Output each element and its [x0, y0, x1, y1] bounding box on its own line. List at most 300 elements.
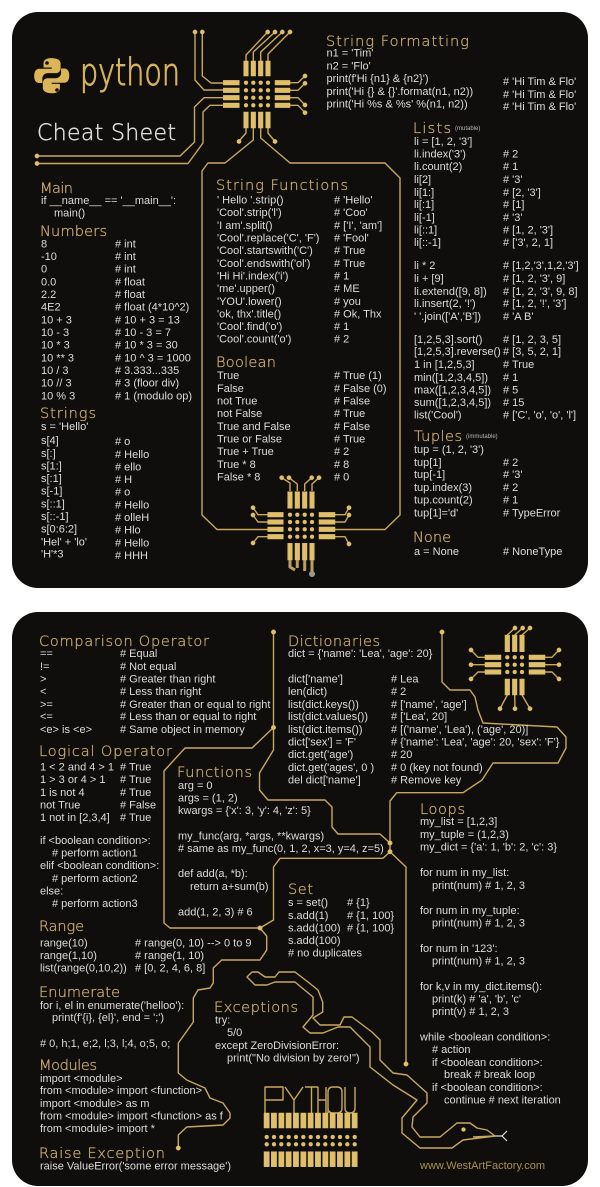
section: Lists: li + [9]	[414, 273, 444, 285]
section: Range: # range(0, 10) --> 0 to 9	[135, 938, 251, 950]
note: immutable: (immutable)	[466, 434, 498, 440]
section: String Functions: 'ok, thx'.title()	[217, 308, 281, 320]
circuit: lower chip	[251, 476, 351, 577]
section: Lists: li[-1]	[414, 212, 435, 224]
section: Logical Operator: # True	[120, 774, 151, 786]
section: Comparison Operator: !=	[40, 661, 49, 673]
section: String Formatting: print('Hi %s & %s' %(n1, n2))	[326, 98, 468, 110]
heading: Raise Exception: Raise Exception	[39, 1146, 165, 1162]
section: Logical Operator: # True	[120, 787, 151, 799]
section: Logical Operator: else:	[40, 886, 63, 898]
section: Lists: # '3'	[503, 212, 522, 224]
section: Dictionaries: dict['sex'] = 'F'	[288, 736, 356, 748]
section: Numbers: 10 - 3	[41, 327, 69, 339]
section: Lists: [1,2,5,3].reverse()	[414, 346, 501, 358]
section: Strings: # olleH	[115, 512, 149, 524]
section: Lists: # 1	[503, 161, 518, 173]
section: Strings: 'H'*3	[41, 548, 64, 560]
section: Main: if __name__ == '__main__':	[41, 195, 176, 207]
section: Range: range(10)	[40, 938, 88, 950]
heading: Lists: Lists	[413, 121, 451, 137]
section: Lists: # ['C', 'o', 'o', 'l']	[503, 410, 576, 422]
section: String Functions: # True	[334, 258, 365, 270]
section: Loops: for num in my_tuple:	[420, 905, 520, 917]
section: Dictionaries: dict.get('ages', 0 )	[288, 762, 374, 774]
section: Loops: print(num) # 1, 2, 3	[432, 880, 525, 892]
section: Modules: import <module>	[40, 1073, 123, 1085]
section: String Functions: # 'Coo'	[334, 207, 368, 219]
section: Comparison Operator: <e> is <e>	[40, 724, 92, 736]
section: Strings: # ello	[115, 462, 141, 474]
section: Dictionaries: del dict['name']	[288, 774, 361, 786]
heading: String Formatting: String Formatting	[326, 34, 469, 50]
section: String Functions: 'Cool'.startswith('C')	[217, 245, 313, 257]
section: Tuples: # 1	[503, 494, 518, 506]
section: Set: s = set()	[288, 897, 328, 909]
section: Lists: # [1, 2, '3', 9]	[503, 273, 565, 285]
section: String Formatting: # 'Hi Tim & Flo'	[503, 89, 576, 101]
section: Loops: for num in '123':	[420, 943, 498, 955]
heading: Dictionaries: Dictionaries	[288, 634, 380, 650]
section: Logical Operator: # True	[120, 762, 151, 774]
section: String Functions: # ['I', 'am']	[334, 220, 382, 232]
panel: top card	[12, 12, 588, 588]
section: None: a = None	[414, 546, 459, 558]
section: Exceptions: 5/0	[227, 1027, 242, 1039]
section: Lists: # [1]	[503, 199, 524, 211]
section: Dictionaries: list(dict.keys())	[288, 699, 359, 711]
section: Boolean: # False	[334, 396, 370, 408]
section: Numbers: # float	[115, 276, 145, 288]
section: Logical Operator: elif <boolean condition>:	[40, 860, 159, 872]
section: Modules: import <module> as m	[40, 1098, 149, 1110]
section: Loops: my_dict = {'a': 1, 'b': 2, 'c': 3}	[420, 842, 557, 854]
section: Boolean: False * 8	[217, 472, 260, 484]
circuit: top chip	[35, 30, 400, 530]
icon: PYTHON chip lettering	[264, 1087, 357, 1167]
section: String Functions: 'Cool'.replace('C', 'F')	[217, 232, 319, 244]
section: Loops: if <boolean condition>:	[432, 1057, 543, 1069]
section: Lists: li.count(2)	[414, 161, 462, 173]
section: Numbers: 10 % 3	[41, 390, 75, 402]
section: Range: # [0, 2, 4, 6, 8]	[135, 962, 205, 974]
section: Strings: s[0:6:2]	[41, 524, 77, 536]
section: Loops: for num in my_list:	[420, 867, 509, 879]
section: Lists: li[::1]	[414, 224, 437, 236]
section: Lists: li = [1, 2, '3']	[414, 136, 472, 148]
section: Dictionaries: # 0 (key not found)	[391, 762, 483, 774]
section: Dictionaries	[288, 634, 560, 786]
heading: None: None	[413, 530, 451, 546]
note: mutable: (mutable)	[455, 126, 480, 132]
section: Logical Operator: # perform action3	[52, 898, 138, 910]
section: Tuples: tup[-1]	[414, 469, 445, 481]
section: Dictionaries: # ['name', 'age']	[391, 699, 467, 711]
section: String Formatting: n1 = 'Tim'	[326, 48, 373, 60]
section: Numbers: 0.0	[41, 276, 56, 288]
section: Lists: # [1, 2, 3, 5]	[503, 334, 561, 346]
section: Strings: # Hlo	[115, 525, 141, 537]
heading: Main: Main	[40, 181, 73, 197]
section: String Functions: 'Cool'.strip('l')	[217, 207, 282, 219]
section: Numbers: 0	[41, 264, 47, 276]
section: Comparison Operator: # Equal	[120, 648, 157, 660]
section: Boolean: # 2	[334, 446, 349, 458]
section: Tuples: # TypeError	[503, 508, 561, 520]
section: Logical Operator: 1 < 2 and 4 > 1	[40, 762, 114, 774]
python logo	[34, 58, 69, 93]
title: Cheat Sheet: Cheat Sheet	[37, 121, 176, 146]
section: Functions: my_func(arg, *args, **kwargs)	[178, 830, 324, 842]
section: Logical Operator: 1 > 3 or 4 > 1	[40, 774, 105, 786]
section: Comparison Operator: # Greater than or equal to right	[120, 699, 270, 711]
section: Dictionaries: dict.get('age')	[288, 749, 353, 761]
heading: Loops: Loops	[420, 802, 465, 818]
section: Numbers: # 3.333...335	[115, 365, 179, 377]
section: Boolean: # 8	[334, 459, 349, 471]
section: Enumerate: print(f'{i}, {el}', end = ';')	[52, 1012, 164, 1024]
section: String Functions: # True	[334, 245, 365, 257]
section: Exceptions: print("No division by zero!")	[227, 1052, 360, 1064]
section: String Functions: # Ok, Thx	[334, 308, 382, 320]
section: Lists: max([1,2,3,4,5])	[414, 384, 491, 396]
heading: Strings: Strings	[40, 406, 96, 422]
section: Logical Operator: # True	[120, 812, 151, 824]
section: Exceptions: except ZeroDivisionError:	[215, 1040, 339, 1052]
section: Lists: li[1:]	[414, 187, 434, 199]
section: Numbers: 10 // 3	[41, 378, 72, 390]
section: Comparison Operator: # Less than or equal to right	[120, 711, 256, 723]
section: Dictionaries: dict['name']	[288, 674, 343, 686]
section: Strings: # Hello	[115, 499, 149, 511]
section: Dictionaries: len(dict)	[288, 686, 327, 698]
section: Comparison Operator: ==	[40, 648, 53, 660]
section: Lists: # ['3', 2, 1]	[503, 237, 553, 249]
section: Logical Operator: 1 not in [2,3,4]	[40, 812, 110, 824]
section: Strings: s[:]	[41, 448, 56, 460]
section: Tuples	[414, 429, 561, 520]
section: String Functions: 'Cool'.count('o')	[217, 334, 291, 346]
heading: Range: Range	[39, 919, 84, 935]
section: Lists: # 'A B'	[503, 311, 534, 323]
section: Functions: return a+sum(b)	[190, 881, 269, 893]
section: Enumerate: for i, el in enumerate('helloo'):	[40, 1000, 184, 1012]
section: Loops: print(num) # 1, 2, 3	[432, 956, 525, 968]
section: Lists: li[:1]	[414, 199, 434, 211]
heading: Exceptions: Exceptions	[214, 1000, 298, 1016]
section: Set: s.add(100)	[288, 935, 341, 947]
section: Lists: # [1,2,'3',1,2,'3']	[503, 260, 579, 272]
section: Lists: # 15	[503, 397, 524, 409]
section: Enumerate	[39, 985, 184, 1050]
section: String Functions: # 1	[334, 321, 349, 333]
section: Set: # {1, 100}	[347, 910, 394, 922]
section: Loops: # action	[432, 1044, 471, 1056]
section: Strings: # o	[115, 436, 130, 448]
section: String Formatting: # 'Hi Tim & Flo'	[503, 76, 576, 88]
heading: Set: Set	[288, 882, 313, 898]
section: Boolean: True	[217, 370, 239, 382]
section: Boolean: True and False	[217, 421, 291, 433]
section: Numbers: # 3 (floor div)	[115, 378, 179, 390]
section: Modules	[39, 1058, 224, 1135]
section: Range: range(1,10)	[40, 950, 97, 962]
section: Loops	[419, 802, 561, 1106]
section: Set: # no duplicates	[288, 948, 362, 960]
section: Tuples: tup = (1, 2, '3')	[414, 444, 484, 456]
section: Boolean: # False (0)	[334, 383, 387, 395]
section: Loops: my_tuple = (1,2,3)	[420, 829, 509, 841]
icon: circuit snake	[247, 972, 507, 1148]
icon: snake eye	[462, 1128, 466, 1132]
section: String Formatting: # 'Hi Tim & Flo'	[503, 101, 576, 113]
section: None	[413, 530, 562, 558]
section: Strings: # o	[115, 487, 130, 499]
section: Strings: s[1:]	[41, 460, 62, 472]
section: Lists	[413, 121, 579, 422]
section: Lists: # [1, 2, '3', 9, 8]	[503, 286, 578, 298]
circuit: board traces	[164, 630, 566, 1150]
section: Dictionaries: dict = {'name': 'Lea', 'age': 20}	[288, 648, 433, 660]
section: Numbers: # int	[115, 238, 136, 250]
section: Tuples: tup.count(2)	[414, 494, 473, 506]
section: Raise Exception: raise ValueError('some error message')	[40, 1160, 231, 1172]
footer: website: www.WestArtFactory.com	[419, 1160, 545, 1172]
section: Strings: 'Hel' + 'lo'	[41, 536, 87, 548]
section: None: # NoneType	[503, 546, 562, 558]
heading: Tuples: Tuples	[414, 429, 462, 445]
section: String Functions: ' Hello '.strip()	[217, 194, 284, 206]
section: Numbers: # 10 ^ 3 = 1000	[115, 352, 191, 364]
section: Logical Operator	[39, 744, 172, 910]
section: Comparison Operator: >=	[40, 699, 53, 711]
section: Logical Operator: if <boolean condition>:	[40, 835, 151, 847]
section: String Functions: 'me'.upper()	[217, 283, 275, 295]
section: Dictionaries: # 2	[391, 686, 406, 698]
section: Lists: li.insert(2, '!')	[414, 298, 476, 310]
section: Dictionaries: list(dict.values())	[288, 711, 368, 723]
section: Lists: li.extend([9, 8])	[414, 286, 487, 298]
section: Strings: # Hello	[115, 537, 149, 549]
section: String Functions: 'Hi Hi'.index('i')	[217, 270, 288, 282]
section: String Formatting: print('Hi {} & {}'.format(n1, n2))	[326, 86, 473, 98]
section: String Functions: # ME	[334, 283, 360, 295]
section: Lists: # 5	[503, 384, 518, 396]
section: Loops: break # break loop	[444, 1069, 535, 1081]
section: Logical Operator: not True	[40, 800, 80, 812]
section: Boolean	[216, 355, 387, 484]
section: Comparison Operator: # Greater than right	[120, 674, 215, 686]
section: Tuples: # 2	[503, 457, 518, 469]
section: Tuples: tup[1]='d'	[414, 508, 458, 520]
section: Modules: from <module> import <function>	[40, 1085, 202, 1097]
heading: Comparison Operator: Comparison Operator	[39, 634, 209, 650]
section: Boolean: # True (1)	[334, 370, 382, 382]
section: Dictionaries: # Lea	[391, 674, 419, 686]
section: Lists: min([1,2,3,4,5])	[414, 372, 488, 384]
section: Loops: print(k) # 'a', 'b', 'c'	[432, 994, 521, 1006]
section: Exceptions: try:	[215, 1014, 230, 1026]
section: Modules: from <module> import <function> as f	[40, 1110, 224, 1122]
section: Lists: # [3, 5, 2, 1]	[503, 346, 561, 358]
section: Lists: li[2]	[414, 174, 431, 186]
section: Comparison Operator: >	[40, 674, 46, 686]
section: String Functions: 'YOU'.lower()	[217, 296, 282, 308]
section: Comparison Operator: # Not equal	[120, 661, 176, 673]
section: Range: list(range(0,10,2))	[40, 962, 127, 974]
heading: Functions: Functions	[177, 765, 252, 781]
section: Numbers: -10	[41, 251, 57, 263]
section: Comparison Operator: <	[40, 686, 46, 698]
section: Numbers: 10 * 3	[41, 340, 70, 352]
section: Numbers: # 10 - 3 = 7	[115, 327, 171, 339]
section: Numbers: # int	[115, 251, 136, 263]
section: Lists: # [2, '3']	[503, 187, 541, 199]
section: Strings: s[::-1]	[41, 511, 69, 523]
section: Numbers: 10 / 3	[41, 365, 69, 377]
section: Dictionaries: # ['Lea', 20]	[391, 711, 447, 723]
heading: String Functions: String Functions	[216, 178, 348, 194]
section: Lists: li.index('3')	[414, 149, 466, 161]
section: Numbers: # 10 * 3 = 30	[115, 340, 178, 352]
section: Dictionaries: # {'name': 'Lea', 'age': 20, 'sex': 'F'}	[391, 736, 560, 748]
section: Raise Exception	[39, 1146, 231, 1172]
section: Boolean: # 0	[334, 472, 349, 484]
section: Boolean: not False	[217, 408, 262, 420]
section: Numbers: 4E2	[41, 302, 61, 314]
section: Functions: add(1, 2, 3) # 6	[178, 906, 253, 918]
section: Strings: s[::1]	[41, 498, 65, 510]
section: Lists: # 2	[503, 149, 518, 161]
section: Main: main()	[54, 208, 85, 220]
section: Tuples: # '3'	[503, 469, 522, 481]
section: Tuples: tup[1]	[414, 457, 442, 469]
section: Lists: list('Cool')	[414, 410, 462, 422]
panel: bottom card	[12, 612, 588, 1186]
section: Lists: # [1, 2, '!', '3']	[503, 298, 566, 310]
section: String Formatting: print(f'Hi {n1} & {n2}')	[326, 73, 429, 85]
section: Tuples: # 2	[503, 482, 518, 494]
heading: Modules: Modules	[39, 1058, 97, 1074]
section: Dictionaries: list(dict.items())	[288, 724, 363, 736]
section: Logical Operator: 1 is not 4	[40, 787, 85, 799]
section: Modules: from <module> import *	[40, 1123, 156, 1135]
section: String Functions: 'I am'.split()	[217, 220, 273, 232]
section: Loops: print(v) # 1, 2, 3	[432, 1006, 509, 1018]
section: Functions: arg = 0	[178, 780, 213, 792]
section: Dictionaries: # Remove key	[391, 774, 462, 786]
section: String Functions: # 2	[334, 334, 349, 346]
section: String Functions: 'Cool'.endswith('ol')	[217, 258, 310, 270]
section: Set	[288, 882, 394, 960]
section: String Formatting	[326, 34, 576, 113]
icon: corner chip	[469, 626, 561, 711]
section: Numbers: 10 ** 3	[41, 352, 74, 364]
section: Strings: # HHH	[115, 550, 148, 562]
section: Numbers: # 10 + 3 = 13	[115, 314, 180, 326]
section: Loops: for k,v in my_dict.items():	[420, 981, 542, 993]
section: Numbers: # float (4*10^2)	[115, 302, 189, 314]
section: String Functions: # you	[334, 296, 361, 308]
section: Exceptions	[214, 1000, 360, 1064]
section: String Functions: # 1	[334, 270, 349, 282]
section: Functions: kwargs = {'x': 3, 'y': 4, 'z': 5}	[178, 805, 311, 817]
section: Loops: print(num) # 1, 2, 3	[432, 918, 525, 930]
section: Loops: continue # next iteration	[444, 1094, 561, 1106]
section: Strings: s[:1]	[41, 473, 62, 485]
section: Comparison Operator: # Less than right	[120, 686, 201, 698]
section: Lists: ' '.join(['A','B'])	[414, 311, 481, 323]
section: Strings: s = 'Hello'	[41, 421, 88, 433]
section: Lists: # 1	[503, 372, 518, 384]
section: Set: s.add(1)	[288, 910, 328, 922]
section: Strings: # Hello	[115, 449, 149, 461]
section: Set: # {1, 100}	[347, 922, 394, 934]
section: Boolean: True or False	[217, 434, 282, 446]
heading: Enumerate: Enumerate	[39, 985, 120, 1001]
section: Dictionaries: # [('name', 'Lea'), ('age', 20)]	[391, 724, 528, 736]
section: String Formatting: n2 = 'Flo'	[326, 60, 371, 72]
section: Numbers: # float	[115, 289, 145, 301]
section: Enumerate: # 0, h;1, e;2, l;3, l;4, o;5, o;	[40, 1038, 170, 1050]
section: Numbers	[40, 224, 192, 402]
section: String Functions: # 'Hello'	[334, 194, 372, 206]
section: Comparison Operator: <=	[40, 711, 53, 723]
section: Lists: # True	[503, 359, 534, 371]
section: Set: # {1}	[347, 897, 370, 909]
section: Comparison Operator: # Same object in memory	[120, 724, 245, 736]
section: Numbers: 10 + 3	[41, 314, 72, 326]
section: Boolean: not True	[217, 396, 257, 408]
section: Loops: my_list = [1,2,3]	[420, 816, 497, 828]
heading: Logical Operator: Logical Operator	[39, 744, 172, 760]
section: Lists: # [1, 2, '3']	[503, 224, 553, 236]
section: Loops: if <boolean condition>:	[432, 1082, 543, 1094]
section: Main	[40, 181, 176, 220]
section: Functions: # same as my_func(0, 1, 2, x=3, y=4, z=5)	[178, 843, 384, 855]
section: Loops: while <boolean condition>:	[419, 1032, 550, 1044]
section: Range	[39, 919, 251, 974]
section: Boolean: False	[217, 383, 244, 395]
section: Dictionaries: # 20	[391, 749, 412, 761]
section: Boolean: # False	[334, 421, 370, 433]
section: Lists: li[::-1]	[414, 237, 441, 249]
section: Functions	[177, 765, 384, 918]
section: Strings: s[-1]	[41, 486, 62, 498]
section: Strings	[40, 406, 149, 562]
section: Lists: 1 in [1,2,5,3]	[414, 359, 475, 371]
section: Lists: # '3'	[503, 174, 522, 186]
section: Range: # range(1, 10)	[135, 950, 204, 962]
section: Functions: def add(a, *b):	[178, 868, 248, 880]
section: Numbers: # 1 (modulo op)	[115, 390, 192, 402]
heading: Numbers: Numbers	[40, 224, 107, 240]
section: Numbers: 2.2	[41, 289, 56, 301]
section: String Functions: # 'Fool'	[334, 232, 369, 244]
section: Logical Operator: # perform action2	[52, 873, 138, 885]
section: Strings: # H	[115, 474, 132, 486]
heading: Boolean: Boolean	[216, 355, 276, 371]
section: Boolean: # True	[334, 408, 365, 420]
title: python: python	[80, 51, 180, 94]
section: Tuples: tup.index(3)	[414, 482, 472, 494]
section: Boolean: True + True	[217, 446, 274, 458]
section: String Functions	[216, 178, 382, 346]
section: Strings: s[4]	[41, 435, 59, 447]
section: Logical Operator: # False	[120, 800, 156, 812]
section: Comparison Operator	[39, 634, 270, 736]
section: String Functions: 'Cool'.find('o')	[217, 321, 282, 333]
